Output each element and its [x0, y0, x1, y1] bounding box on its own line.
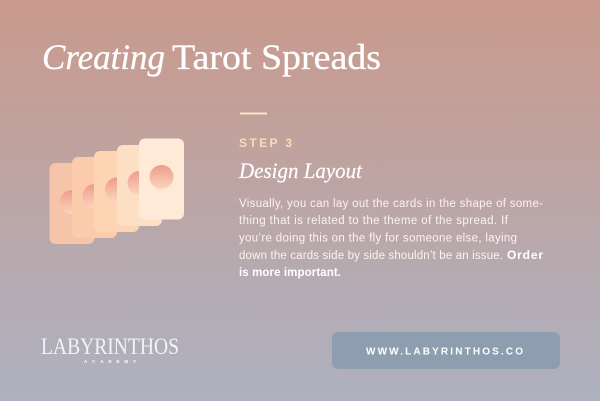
title: Tarot Spreads [172, 37, 381, 77]
body text: Order [507, 248, 543, 262]
body text: is more important. [239, 267, 341, 279]
body text: you’re doing this on the fly for someone else, laying [239, 232, 517, 244]
body text: Visually, you can lay out the cards in the shape of some- [239, 198, 543, 210]
logo: Labyrinthos Academy: ACADEMY [84, 359, 136, 364]
title [42, 37, 381, 77]
body text [239, 198, 543, 279]
logo: Labyrinthos Academy: LABYRINTHOS [41, 334, 179, 359]
accent rule [240, 112, 267, 114]
step heading: Design Layout [238, 158, 363, 183]
title: Creating [42, 37, 165, 77]
step label: STEP 3 [239, 136, 292, 150]
website button [332, 332, 560, 369]
body text: down the cards side by side shouldn’t be an issue. [239, 250, 503, 262]
website button: WWW.LABYRINTHOS.CO [366, 346, 523, 358]
icon: fanned tarot cards [50, 138, 184, 244]
body text: thing that is related to the theme of the spread. If [239, 215, 509, 227]
